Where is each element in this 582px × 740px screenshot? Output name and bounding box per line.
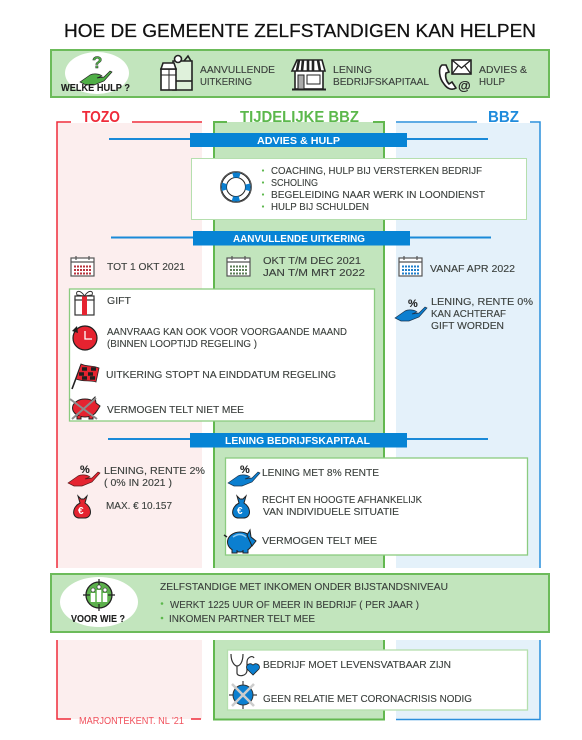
text: voor wie criteria: INKOMEN PARTNER TELT MEE xyxy=(169,613,315,625)
text: geen relatie: GEEN RELATIE MET CORONACRISIS NODIG xyxy=(263,693,472,705)
icon: gift xyxy=(75,291,94,315)
heading: tozo: TOZO xyxy=(82,109,120,126)
text: voor wie criteria: WERKT 1225 UUR OF MEER IN BEDRIJF ( PER JAAR ) xyxy=(170,599,419,611)
icon: phone, mail and at sign xyxy=(440,60,471,93)
text: lening bedrijfskapitaal: BEDRIJFSKAPITAAL xyxy=(333,76,429,88)
text: aanvraag xyxy=(107,326,347,350)
credit: MARJONTEKENT. NL '21 xyxy=(79,715,184,727)
text: lening rente 2%: ( 0% IN 2021 ) xyxy=(104,477,172,489)
text: lening bedrijfskapitaal: LENING xyxy=(333,64,372,76)
panel: tozo column xyxy=(57,109,202,568)
list: advies en hulp: COACHING, HULP BIJ VERSTERKEN BEDRIJF xyxy=(271,165,482,177)
text: advies en hulp xyxy=(479,64,527,88)
title: HOE DE GEMEENTE ZELFSTANDIGEN KAN HELPEN xyxy=(64,21,536,41)
icon: red money bag xyxy=(74,496,90,518)
list: advies en hulp: HULP BIJ SCHULDEN xyxy=(271,201,369,213)
icon: stethoscope with heart xyxy=(231,654,259,676)
panel: bbz column xyxy=(396,109,540,568)
text: aanvraag: AANVRAAG KAN OOK VOOR VOORGAANDE MAAND xyxy=(107,326,347,338)
list: advies en hulp: BEGELEIDING NAAR WERK IN LOONDIENST xyxy=(271,189,486,201)
text: advies en hulp: ADVIES & xyxy=(479,64,527,76)
text: recht en hoogte: RECHT EN HOOGTE AFHANKELIJK xyxy=(262,494,422,506)
icon: red hand with percent: % xyxy=(80,464,90,476)
label: welke hulp: WELKE HULP ? xyxy=(61,83,130,94)
panel: tozo column bottom xyxy=(57,640,202,727)
icon: crossed out piggy bank xyxy=(70,397,100,419)
text: tijdelijke bbz periods: OKT T/M DEC 2021 xyxy=(263,255,361,267)
panel: aanvullende uitkering shared conditions xyxy=(70,289,374,421)
icon: calendar green xyxy=(227,256,250,276)
text: lening rente 0% xyxy=(431,296,533,332)
panel: welke hulp banner xyxy=(51,50,549,97)
panel: advies en hulp content xyxy=(192,158,526,220)
text: lening rente 0%: GIFT WORDEN xyxy=(431,320,504,332)
text: aanvullende uitkering: UITKERING xyxy=(200,76,252,88)
text: recht en hoogte xyxy=(262,494,422,518)
icon: blue money bag: € xyxy=(237,506,243,517)
text: lening bedrijfskapitaal xyxy=(333,64,429,88)
section band: lening bedrijfskapitaal: LENING BEDRIJFSKAPITAAL xyxy=(225,436,370,447)
section band: aanvullende uitkering xyxy=(111,231,491,246)
icon: blue hand with percent xyxy=(395,298,427,321)
text: voor wie criteria: ZELFSTANDIGE MET INKOMEN ONDER BIJSTANDSNIVEAU xyxy=(160,581,448,593)
icon: calendar red xyxy=(71,256,94,276)
list: advies en hulp xyxy=(262,165,486,213)
icon: chequered flag xyxy=(72,364,99,389)
text: vermogen telt mee: VERMOGEN TELT MEE xyxy=(262,535,377,547)
section band: lening bedrijfskapitaal xyxy=(108,433,488,448)
icon: blue money bag xyxy=(233,496,250,518)
text: tijdelijke bbz periods xyxy=(263,255,365,279)
panel: bbz column bottom xyxy=(396,640,540,720)
icon: lifebuoy xyxy=(220,172,252,202)
text: lening rente 2% xyxy=(104,465,205,489)
text: aanvraag: (BINNEN LOOPTIJD REGELING ) xyxy=(107,338,257,350)
section band: advies en hulp xyxy=(109,133,488,147)
icon: blue hand with percent: % xyxy=(240,464,250,476)
panel: tijdelijke bbz lening xyxy=(224,458,528,555)
heading: tijdelijke bbz: TIJDELIJKE BBZ xyxy=(240,109,359,126)
icon: helping hand with question mark xyxy=(65,52,129,94)
text: lening rente 0%: LENING, RENTE 0% xyxy=(431,296,533,308)
text: vanaf apr 2022: VANAF APR 2022 xyxy=(430,263,515,275)
list: advies en hulp: SCHOLING xyxy=(271,177,318,189)
text: tot 1 okt 2021: TOT 1 OKT 2021 xyxy=(107,261,185,273)
text: recht en hoogte: VAN INDIVIDUELE SITUATIE xyxy=(263,506,399,518)
text: advies en hulp: HULP xyxy=(479,76,505,88)
panel: tijdelijke bbz column xyxy=(213,109,385,568)
icon: clock xyxy=(72,326,97,350)
icon: blue piggy bank xyxy=(224,530,256,553)
text: voor wie criteria xyxy=(160,581,448,625)
text: aanvullende uitkering: AANVULLENDE xyxy=(200,64,275,76)
text: levensvatbaar: BEDRIJF MOET LEVENSVATBAAR ZIJN xyxy=(263,659,451,671)
icon: crossed out coronavirus xyxy=(229,681,257,709)
icon: shop xyxy=(292,60,326,90)
icon: red money bag: € xyxy=(78,506,84,517)
heading: bbz: BBZ xyxy=(488,109,519,126)
text: lening met 8%: LENING MET 8% RENTE xyxy=(262,467,379,479)
text: uitkering stopt: UITKERING STOPT NA EINDDATUM REGELING xyxy=(106,369,336,381)
text: aanvullende uitkering xyxy=(200,64,275,88)
panel: voor wie banner xyxy=(51,574,549,632)
section band: advies en hulp: ADVIES & HULP xyxy=(257,136,340,147)
section band: aanvullende uitkering: AANVULLENDE UITKERING xyxy=(233,234,365,245)
icon: blue hand with percent: % xyxy=(408,298,418,310)
icon: phone, mail and at sign: @ xyxy=(458,78,471,93)
icon: helping hand with question mark: ? xyxy=(92,53,102,72)
text: lening rente 2%: LENING, RENTE 2% xyxy=(104,465,205,477)
panel: tijdelijke bbz conditions xyxy=(228,650,528,710)
text: lening rente 0%: KAN ACHTERAF xyxy=(431,308,506,320)
text: max bedrag: MAX. € 10.157 xyxy=(106,500,172,512)
icon: blue hand with percent xyxy=(228,464,260,486)
icon: groceries xyxy=(161,56,192,90)
icon: target group xyxy=(60,577,138,627)
text: vermogen telt niet mee: VERMOGEN TELT NIET MEE xyxy=(107,404,244,416)
icon: red hand with percent xyxy=(68,464,100,486)
text: tijdelijke bbz periods: JAN T/M MRT 2022 xyxy=(263,267,365,279)
text: gift: GIFT xyxy=(107,295,132,307)
icon: calendar blue xyxy=(399,256,422,276)
label: voor wie: VOOR WIE ? xyxy=(71,614,125,625)
panel: tijdelijke bbz column bottom xyxy=(213,640,385,720)
